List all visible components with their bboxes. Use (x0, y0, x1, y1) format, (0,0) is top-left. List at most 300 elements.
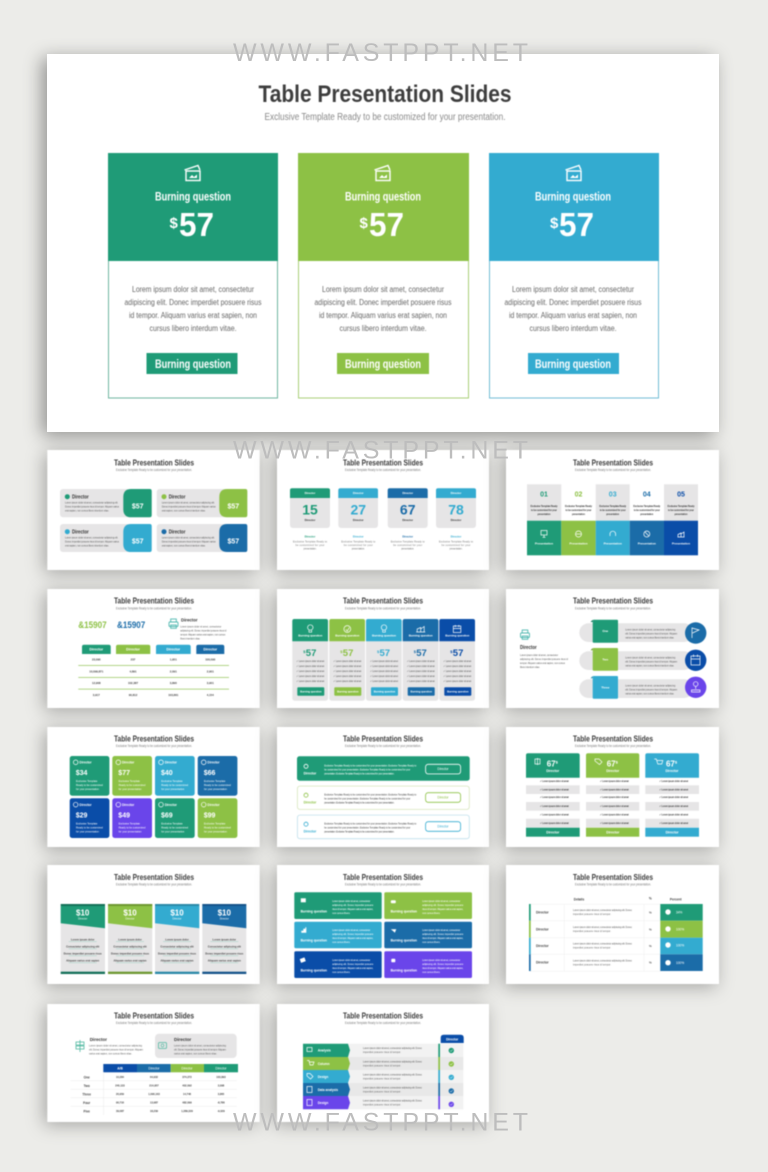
banner: lime outline: be customized for your presentation. Exclusive Template Ready to be customized for your (324, 798, 411, 801)
step descriptions: Exclusive Template Ready (599, 505, 627, 508)
director note right: varius erat sapien, non cursus libero vitae. (174, 1053, 217, 1056)
stat card 78: Director (451, 534, 462, 538)
pricing column lime: 57 (343, 648, 353, 659)
pricing column sky: ✓ Lorem ipsum dolor sit amet (370, 665, 398, 668)
table rows: 4,891 (130, 669, 137, 673)
panel: slide 12 percent table: Exclusive Template Ready to be customized for your presentation. (575, 882, 651, 886)
list column sky: 67 (666, 760, 675, 769)
panel: slide 4 data table: Director (166, 648, 181, 652)
row labels and descriptions: Lorem ipsum dolor sit amet, consectetur adipiscing elit. Donec (573, 909, 633, 912)
percent column (660, 904, 703, 971)
pricing column lime: ✓ Lorem ipsum dolor sit amet (333, 665, 362, 668)
panel: slide 2 number cards: Exclusive Template Ready to be customized for your presentation. (345, 468, 421, 472)
pricing column lime: Burning question (337, 690, 359, 694)
pill row: three: Three (601, 685, 610, 689)
stat card 78: Director (451, 518, 462, 522)
table row values: 13,987 (150, 1100, 159, 1104)
tile $40: $40 (161, 770, 173, 777)
pricing column blue: ✓ Lorem ipsum dolor sit amet (407, 660, 435, 663)
slanted column blue: Consectetur adipiscing elit (208, 944, 241, 948)
arrow tag column: Column (318, 1062, 330, 1066)
pricing column sky (366, 619, 402, 701)
pricing column dark blue: ✓ Lorem ipsum dolor sit amet (443, 660, 472, 663)
row labels and descriptions: Director (536, 911, 549, 915)
pricing column blue: ✓ Lorem ipsum dolor sit amet (407, 670, 435, 673)
pricing column dark blue: ✓ Lorem ipsum dolor sit amet (443, 665, 472, 668)
pricing column green: ✓ Lorem ipsum dolor sit amet (296, 675, 325, 678)
tile $69: Director (165, 803, 178, 807)
card: lime director: erat sapien, non cursus libero interdum vitae. (162, 510, 206, 513)
stat card 27: 27 (351, 502, 366, 518)
list column green: ✓ Lorem ipsum dolor sit amet (540, 822, 569, 825)
slanted column lime (108, 904, 152, 974)
tile $99: Ready to be customized (204, 826, 231, 829)
pill row: two: varius erat sapien, non cursus libero interdum vitae. (625, 664, 675, 667)
step numbers: 04 (643, 492, 651, 499)
list column green: 67 (547, 760, 556, 769)
block dark blue (294, 951, 382, 978)
card: sky director: Donec imperdiet posuere risus id tempor. Aliquam varius (65, 540, 120, 543)
panel: slide 14 arrow tag rows: Exclusive Template Ready to be customized for your presentation. (345, 1021, 421, 1025)
tile $34: Ready to be customized (76, 784, 103, 787)
icon: signpost (76, 1040, 84, 1052)
row labels and descriptions (536, 909, 652, 966)
panel: slide 14 arrow tag rows: Table Presentation Slides (343, 1011, 423, 1021)
pricing column dark blue: ✓ Lorem ipsum dolor sit amet (443, 680, 472, 683)
step descriptions: presentation (572, 513, 585, 516)
slanted column lime: Donec imperdiet posuere risus (111, 951, 150, 955)
table row values: 18,239 (150, 1109, 159, 1113)
row descriptions: imperdiet posuere risus id tempor. (363, 1090, 401, 1094)
table header: Director (215, 1066, 228, 1070)
list column lime: ✓ Lorem ipsum dolor sit amet (600, 796, 629, 799)
arrow tag design 2: Design (318, 1101, 328, 1105)
slanted column lime: Director (125, 917, 135, 921)
stat card 78: presentation. (450, 547, 463, 550)
list column sky: $ (675, 760, 678, 764)
panel: slide 7 eight price tiles: Table Presentation Slides (114, 734, 194, 744)
slanted column lime: Lorem ipsum dolor (118, 937, 142, 941)
pill row: one: elit. Donec imperdiet posuere risus id tempor. Aliquam (625, 632, 677, 635)
card: green director: Director (72, 494, 89, 500)
panel: slide 7 eight price tiles: Exclusive Template Ready to be customized for your presentation. (116, 744, 192, 748)
panel: slide 4 data table: Director (89, 648, 104, 652)
slanted column lime: $10 (123, 908, 137, 917)
stat card 67: Director (402, 491, 414, 495)
panel: main hero slide (47, 54, 719, 432)
card: green director: erat sapien, non cursus libero interdum vitae. (65, 510, 109, 513)
panel: slide 13 comparison table: Exclusive Template Ready to be customized for your presentation. (116, 1021, 192, 1025)
slanted column sky: Lorem ipsum dolor (165, 937, 189, 941)
pricing card: sky: Burning question (535, 357, 611, 371)
tile $69: Ready to be customized (161, 826, 189, 829)
list column lime: Director (606, 830, 620, 834)
list column sky: ✓ Lorem ipsum dolor sit amet (659, 805, 688, 808)
panel: slide 11 six colour blocks: Exclusive Template Ready to be customized for your presentation. (345, 882, 421, 886)
block blue: risus id tempor. Aliquam varius erat sapien, (422, 937, 464, 940)
banner: lime outline: Director (304, 801, 317, 805)
arrow tag design 2 (303, 1096, 350, 1109)
arrow tag design: Design (318, 1075, 328, 1079)
tile $49 (112, 798, 152, 838)
stat card 15 (290, 488, 330, 550)
pill row: two: Two (602, 657, 608, 661)
table rows: 1,951 (170, 657, 177, 661)
tile $99: Exclusive Template (204, 822, 226, 825)
step numbers: 01 (540, 492, 548, 499)
step descriptions (530, 505, 695, 516)
slanted column sky: Consectetur adipiscing elit (160, 944, 194, 948)
table column headers: Details (574, 898, 584, 902)
table row values: Three (82, 1092, 91, 1096)
tile $66: $66 (204, 770, 215, 777)
pricing column lime: ✓ Lorem ipsum dolor sit amet (333, 675, 362, 678)
percent column: 100% (676, 943, 684, 947)
banner: green: Director (304, 771, 317, 775)
pricing column blue: $ (414, 649, 417, 654)
panel: slide 11 six colour blocks: Table Presentation Slides (343, 872, 423, 882)
block sky: risus id tempor. Aliquam varius erat sapien, (332, 937, 374, 940)
banner: green: Exclusive Template Ready to be customized for your presentation. Exclusive Template Ready to (324, 764, 417, 767)
card: lime director: Director (169, 494, 185, 500)
panel: slide 1 director price cards (47, 450, 260, 570)
pricing card: lime: cursus libero interdum vitae. (340, 324, 426, 333)
block green: non cursus libero. (332, 912, 351, 915)
pricing card: green: $ (170, 215, 178, 232)
watermark middle: WWW.FASTPPT.NET (233, 436, 528, 464)
block blue: Burning question (391, 939, 417, 943)
panel: slide 9 three feature lists: Table Presentation Slides (573, 734, 653, 744)
banner: green: be customized for your presentation. Exclusive Template Ready to be customized for your (324, 768, 411, 771)
panel: slide 13 comparison table: Table Presentation Slides (114, 1011, 194, 1021)
tile $66: Director (207, 761, 220, 765)
arrow tag analysis: Analysis (318, 1048, 331, 1052)
table row values: 39,087 (116, 1109, 125, 1113)
table rows: 2,901 (207, 669, 214, 673)
panel: slide 14 arrow tag rows (277, 1004, 489, 1122)
card: lime director: Lorem ipsum dolor sit amet, consectetur adipiscing elit. (162, 501, 215, 504)
tile $69: Exclusive Template (161, 822, 183, 825)
pricing card: sky: cursus libero interdum vitae. (530, 324, 616, 333)
pill row: three: varius erat sapien, non cursus libero interdum vitae. (625, 692, 675, 695)
card: blue director: $57 (227, 538, 239, 545)
card: green director: Lorem ipsum dolor sit amet, consectetur adipiscing elit. (65, 501, 118, 504)
pricing card: lime: Lorem ipsum dolor sit amet, consectetur (322, 285, 444, 294)
block purple: Lorem ipsum dolor sit amet, consectetur (422, 959, 461, 962)
row descriptions: imperdiet posuere risus id tempor. (363, 1104, 401, 1107)
banner: green: presentation. Exclusive Template Ready to be customized for your presentation. (324, 772, 395, 775)
card: green director: $57 (132, 503, 144, 510)
row labels and descriptions: Director (536, 944, 549, 948)
stat card 78: 78 (448, 502, 464, 518)
block green: risus id tempor. Aliquam varius erat sapien, (332, 908, 374, 911)
director note (180, 618, 227, 640)
list column green (526, 753, 580, 837)
pricing card: sky: $ (550, 215, 559, 232)
pricing column green: $ (303, 649, 306, 654)
table row values: 3,865 (218, 1092, 225, 1096)
panel: slide 3 five step columns: Table Presentation Slides (573, 458, 653, 468)
panel: slide 4 data table (47, 589, 260, 708)
tile $66: for your presentation (204, 788, 228, 791)
list column sky: Director (666, 830, 679, 834)
stat card 27 (338, 488, 378, 550)
tile $34: for your presentation (76, 788, 100, 791)
column colour blocks (527, 521, 698, 555)
director note: tempor. Aliquam varius erat sapien, non cursus (180, 634, 226, 636)
slanted column green: Consectetur adipiscing elit (66, 944, 99, 948)
pill row: two (579, 648, 706, 671)
tile $69: for your presentation (161, 830, 185, 833)
row accent bars (529, 904, 531, 971)
pricing column dark blue: 57 (453, 648, 463, 659)
arrow tag data analysis: Data analysis (318, 1088, 338, 1092)
tile $66 (198, 756, 237, 796)
list column green: ✓ Lorem ipsum dolor sit amet (540, 780, 569, 783)
director note left: elit. Donec imperdiet posuere risus id tempor. Aliquam (89, 1049, 143, 1052)
list column green: $ (556, 760, 559, 764)
panel: slide 8 three banner rows: Table Presentation Slides (343, 734, 423, 744)
card: sky director: $57 (132, 538, 144, 545)
icon: printer (169, 619, 178, 628)
tile $49: Ready to be customized (119, 826, 146, 829)
pricing column dark blue: ✓ Lorem ipsum dolor sit amet (443, 670, 472, 673)
pricing card: lime: id tempor. Aliquam varius erat sapien, non (319, 311, 447, 320)
pricing column blue: ✓ Lorem ipsum dolor sit amet (407, 675, 435, 678)
row labels and descriptions: Lorem ipsum dolor sit amet, consectetur adipiscing elit. Donec (573, 943, 633, 946)
table rows: 10,099,871 (89, 669, 104, 673)
stat card 67: Director (402, 534, 414, 538)
row descriptions: Lorem ipsum dolor sit amet, consectetur adipiscing elit. Donec (363, 1074, 423, 1076)
row labels and descriptions: imperdiet posuere risus id tempor. (573, 964, 611, 966)
list column green: Director (546, 830, 560, 834)
card: lime director: $57 (227, 503, 239, 510)
step labels: Presentation (604, 541, 622, 545)
tile $77: Director (122, 761, 135, 765)
stat card 67 (388, 488, 428, 550)
table row values: 10,284 (116, 1075, 125, 1079)
list column lime: Director (606, 769, 620, 773)
director note left (89, 1037, 143, 1056)
pill row: one: varius erat sapien, non cursus libero interdum vitae. (625, 636, 675, 639)
tile $49: Director (122, 803, 135, 807)
director note right: Director (174, 1037, 192, 1042)
pricing card: sky: 57 (559, 206, 594, 243)
block sky: Burning question (301, 939, 327, 943)
step labels: Presentation (638, 541, 656, 545)
banner: sky outline: presentation. Exclusive Template Ready to be customized for your presentation. (324, 831, 395, 834)
step labels: Presentation (535, 541, 553, 545)
tile $34: Exclusive Template (76, 780, 98, 783)
step descriptions: presentation (606, 513, 620, 516)
director note left: Director (90, 1037, 107, 1042)
pricing column sky: ✓ Lorem ipsum dolor sit amet (370, 680, 398, 683)
tile $34: Director (79, 761, 92, 765)
block blue: non cursus libero. (422, 941, 441, 944)
percent column: 100% (676, 961, 684, 965)
table rows (89, 657, 216, 697)
banner: sky outline: be customized for your presentation. Exclusive Template Ready to be customized for your (324, 827, 411, 830)
table rows: 3,917 (93, 693, 100, 697)
pricing column sky: Burning question (372, 633, 396, 637)
pricing card: lime: Burning question (345, 357, 421, 371)
banner: lime outline: presentation. Exclusive Template Ready to be customized for your presentation. (324, 802, 395, 805)
table rows: 2,091 (170, 669, 177, 673)
card: sky director: Director (72, 529, 89, 535)
table row values: 1,289,329 (181, 1109, 193, 1113)
row labels and descriptions: imperdiet posuere risus id tempor. (573, 913, 611, 916)
panel: slide 3 five step columns (506, 450, 719, 570)
table row values: 1,090,163 (148, 1092, 160, 1096)
pricing card: sky: Lorem ipsum dolor sit amet, consectetur (512, 285, 634, 294)
step descriptions: presentation (674, 513, 688, 516)
panel: slide 8 three banner rows: Exclusive Template Ready to be customized for your presentation. (345, 744, 421, 748)
table row values: 214,957 (149, 1084, 159, 1088)
tile $29: for your presentation (76, 830, 100, 833)
stat card 78: Exclusive Template Ready to (439, 541, 474, 544)
panel: slide 6 three pills: Table Presentation Slides (573, 596, 653, 606)
card: blue director: Donec imperdiet posuere risus id tempor. Aliquam varius (162, 540, 216, 543)
slanted column sky: $10 (170, 908, 184, 917)
pill row: three: elit. Donec imperdiet posuere risus id tempor. Aliquam (625, 688, 677, 691)
table row values: Four (83, 1101, 91, 1105)
row labels and descriptions: % (649, 944, 652, 948)
step descriptions: to be customized for your (668, 509, 694, 512)
panel: slide 4 data table: Director (126, 648, 140, 652)
stat card 27: Director (353, 491, 365, 495)
pricing card: sky: Burning question (535, 190, 611, 204)
step descriptions: presentation (640, 513, 654, 516)
panel: slide 6 three pills (506, 589, 719, 708)
pricing card: sky: id tempor. Aliquam varius erat sapien, non (509, 311, 637, 320)
block dark blue: Burning question (301, 968, 327, 972)
block green: Burning question (301, 909, 327, 913)
pricing column sky: Burning question (374, 690, 396, 694)
list column lime: ✓ Lorem ipsum dolor sit amet (600, 805, 629, 808)
slanted column blue: Director (220, 917, 229, 921)
table row values: -8,786 (217, 1100, 225, 1104)
pricing card: green: adipiscing elit. Donec imperdiet posuere risus (124, 298, 262, 307)
table rows: 12,908 (92, 681, 101, 685)
slanted column sky: Director (172, 917, 182, 921)
panel: slide 9 three feature lists (506, 727, 719, 847)
director note: adipiscing elit. Donec imperdiet posuere risus id (180, 630, 227, 632)
table row values: 103,893 (216, 1075, 226, 1079)
table column headers (574, 897, 682, 902)
panel: slide 12 percent table (506, 865, 719, 984)
slanted column blue: $10 (218, 908, 232, 917)
step numbers: 02 (575, 492, 582, 499)
step descriptions: Exclusive Template Ready (565, 505, 593, 508)
arrow tag data analysis (303, 1083, 350, 1096)
pricing card: green: 57 (179, 206, 214, 243)
stat card 67: Exclusive Template Ready to (391, 541, 425, 544)
pricing card: sky: adipiscing elit. Donec imperdiet posuere risus (504, 298, 642, 307)
block lime: adipiscing elit. Donec imperdiet posuere (422, 904, 464, 907)
banner: green: Director (437, 767, 450, 771)
pricing card: lime (298, 153, 469, 398)
step descriptions: presentation (538, 513, 551, 516)
director note: Lorem ipsum dolor sit amet, consectetur (520, 654, 558, 657)
panel: slide 10 slanted price columns: Exclusive Template Ready to be customized for your presentation. (116, 882, 192, 886)
table row values: 402,092 (182, 1084, 192, 1088)
stat card 67: Director (402, 518, 414, 522)
stat card 67: 67 (400, 502, 416, 518)
list column green: Director (546, 769, 560, 773)
list column lime: ✓ Lorem ipsum dolor sit amet (600, 814, 629, 817)
panel: slide 9 three feature lists: Exclusive Template Ready to be customized for your presentation. (575, 744, 651, 748)
director note (520, 645, 569, 669)
hero title: Table Presentation Slides (258, 81, 512, 108)
row descriptions: imperdiet posuere risus id tempor. (363, 1051, 401, 1054)
banner: sky outline (297, 815, 469, 839)
tile $99: $99 (204, 812, 215, 819)
panel: slide 4 data table: Director (203, 648, 218, 652)
pill row: three (579, 676, 706, 699)
list column lime (586, 753, 639, 837)
block dark blue: adipiscing elit. Donec imperdiet posuere (332, 963, 374, 966)
table rows: 237 (131, 657, 136, 661)
table row values: -9,029 (217, 1109, 225, 1113)
list column sky: Director (665, 769, 679, 773)
card: green director: Donec imperdiet posuere risus id tempor. Aliquam varius (65, 505, 120, 508)
pricing card: lime: $ (360, 215, 368, 232)
tile $66: Ready to be customized (204, 784, 231, 787)
list column sky: ✓ Lorem ipsum dolor sit amet (659, 788, 688, 792)
column grey backgrounds (527, 484, 698, 521)
hero slide background (47, 54, 719, 432)
banner: lime outline: Director (437, 796, 450, 800)
pricing card: green: Burning question (155, 190, 231, 204)
step labels: Presentation (569, 541, 588, 545)
tile $99: Director (207, 803, 220, 807)
pill row: three: Lorem ipsum dolor sit amet, consectetur adipiscing (625, 684, 676, 687)
panel: slide 5 five pricing columns: Exclusive Template Ready to be customized for your presentation. (345, 606, 421, 610)
panel: slide 11 six colour blocks (277, 865, 489, 984)
row descriptions: Lorem ipsum dolor sit amet, consectetur adipiscing elit. Donec (363, 1086, 423, 1090)
pill row: two: elit. Donec imperdiet posuere risus id tempor. Aliquam (625, 660, 677, 663)
table rows: 3,890 (170, 681, 177, 685)
pricing column lime: ✓ Lorem ipsum dolor sit amet (333, 670, 362, 673)
director header pill (441, 1035, 464, 1043)
director note right: Lorem ipsum dolor sit amet, consectetur adipiscing (174, 1045, 227, 1048)
arrow tag analysis (303, 1044, 350, 1057)
watermark bottom: WWW.FASTPPT.NET (233, 1108, 528, 1136)
status check dots (449, 1048, 454, 1107)
banner: green (297, 756, 470, 781)
list column lime: ✓ Lorem ipsum dolor sit amet (600, 822, 629, 825)
card: blue director: Lorem ipsum dolor sit amet, consectetur adipiscing elit. (162, 536, 215, 539)
director note: tempor. Aliquam varius erat sapien, non cursus (520, 662, 566, 665)
row labels and descriptions: Director (536, 928, 549, 932)
stat card 67: presentation. (401, 547, 414, 550)
table row values: 14,748 (183, 1092, 192, 1096)
table grid lines (530, 904, 661, 972)
pricing card: sky (489, 153, 659, 398)
table row values: Five (84, 1110, 90, 1114)
stat card 78: Director (451, 491, 462, 495)
row labels and descriptions: Lorem ipsum dolor sit amet, consectetur adipiscing elit. Donec (573, 960, 633, 962)
block sky: adipiscing elit. Donec imperdiet posuere (332, 933, 374, 936)
pricing column dark blue: $ (450, 649, 453, 654)
step numbers: 05 (677, 492, 685, 499)
pricing card: lime: adipiscing elit. Donec imperdiet posuere risus (314, 298, 452, 307)
pricing column lime (329, 619, 365, 701)
row descriptions: imperdiet posuere risus id tempor. (363, 1078, 401, 1080)
step numbers: 03 (609, 492, 617, 499)
pricing column dark blue: Burning question (447, 690, 469, 694)
pricing column green: 57 (306, 648, 316, 659)
